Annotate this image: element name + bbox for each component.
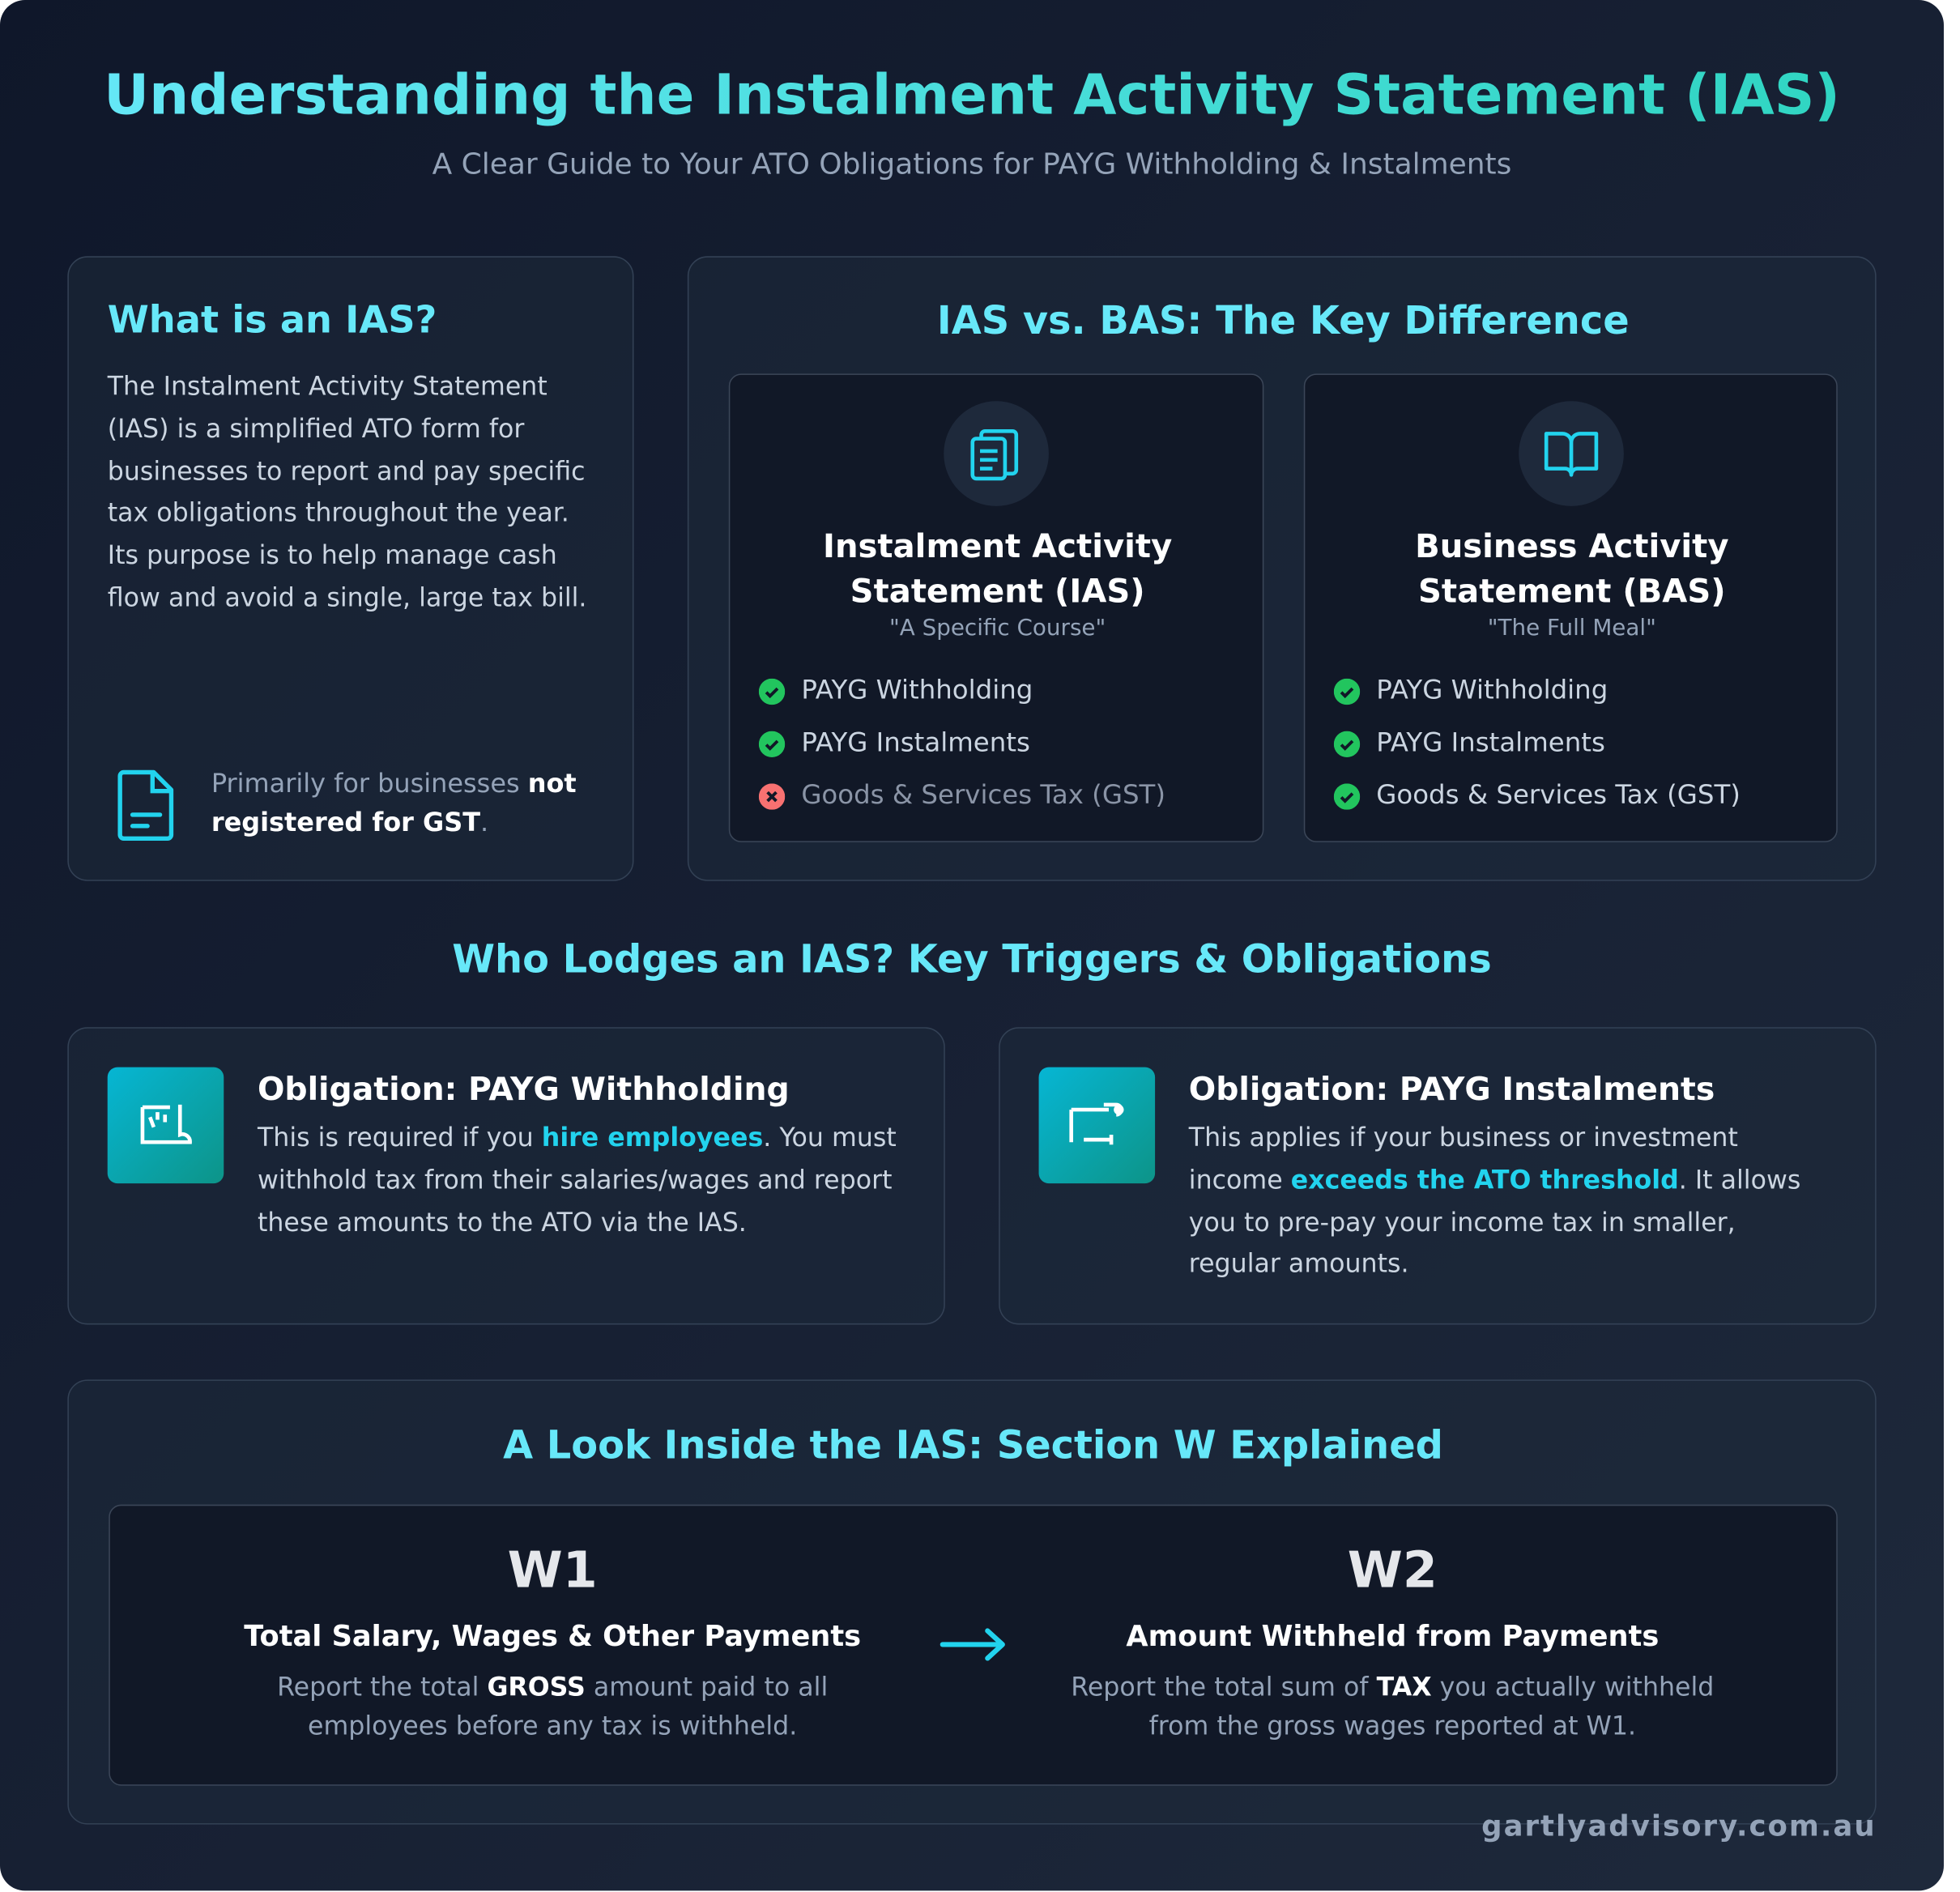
sub-card: IAS: Goods & Services Tax (GST) bbox=[801, 780, 1165, 810]
icon: withholding bbox=[108, 1067, 224, 1183]
heading: What is an IAS? bbox=[108, 299, 437, 343]
sub-card: BAS: PAYG Instalments bbox=[1376, 727, 1605, 757]
icon: document bbox=[117, 769, 173, 841]
text: This applies if your business or investment income exceeds the ATO threshold. It allows you to pre-pay your income tax in smaller, regular amounts. bbox=[1189, 1123, 1800, 1279]
icon: clipboard bbox=[944, 401, 1049, 506]
panel: PAYG withholding bbox=[67, 1027, 945, 1324]
panel: section W bbox=[67, 1379, 1877, 1825]
inner box bbox=[109, 1505, 1838, 1786]
title: Obligation: PAYG Withholding bbox=[258, 1071, 790, 1109]
note text: Primarily for businesses not registered for GST. bbox=[211, 769, 577, 837]
W2: Report the total sum of TAX you actually withheld bbox=[1071, 1672, 1714, 1702]
title: Understanding the Instalment Activity Statement (IAS) bbox=[104, 62, 1840, 127]
sub-card: BAS: PAYG Withholding bbox=[1376, 675, 1608, 705]
icon: book bbox=[1519, 401, 1624, 506]
sub-card: IAS: PAYG Withholding bbox=[801, 675, 1033, 705]
title bbox=[1415, 529, 1728, 611]
W1: W1 bbox=[508, 1542, 598, 1600]
W2: W2 bbox=[1348, 1542, 1438, 1600]
title: Statement (IAS) bbox=[850, 573, 1145, 611]
title: Statement (BAS) bbox=[1418, 573, 1726, 611]
section heading: who lodges: Who Lodges an IAS? Key Triggers & Obligations bbox=[452, 937, 1492, 982]
title: Business Activity bbox=[1415, 529, 1728, 566]
sub-card: BAS: Goods & Services Tax (GST) bbox=[1376, 780, 1741, 810]
W1: Report the total GROSS amount paid to all bbox=[277, 1672, 828, 1702]
W2 bbox=[1071, 1542, 1714, 1741]
subtitle: A Clear Guide to Your ATO Obligations for PAYG Withholding & Instalments bbox=[432, 147, 1511, 181]
W2: from the gross wages reported at W1. bbox=[1149, 1711, 1636, 1741]
list bbox=[758, 679, 786, 705]
panel: IAS vs BAS bbox=[688, 256, 1877, 881]
title: Instalment Activity bbox=[823, 529, 1172, 566]
heading: IAS vs. BAS: The Key Difference bbox=[937, 299, 1630, 343]
sub-card: BAS bbox=[1304, 373, 1838, 842]
text: This is required if you hire employees. You must withhold tax from their salaries/wages and report these amounts to the ATO via the IAS. bbox=[258, 1123, 897, 1237]
panel: PAYG instalments bbox=[999, 1027, 1877, 1324]
list bbox=[1333, 679, 1361, 705]
footer: gartlyadvisory.com.au bbox=[1481, 1811, 1877, 1843]
W1: employees before any tax is withheld. bbox=[308, 1711, 797, 1741]
sub-card: IAS: PAYG Instalments bbox=[801, 727, 1030, 757]
tagline: "The Full Meal" bbox=[1488, 615, 1656, 641]
title bbox=[823, 529, 1172, 611]
sub-card: IAS bbox=[729, 373, 1263, 842]
panel: what is an IAS bbox=[67, 256, 634, 881]
W1: Total Salary, Wages & Other Payments bbox=[244, 1621, 861, 1653]
icon: instalments bbox=[1039, 1067, 1155, 1183]
title: Obligation: PAYG Instalments bbox=[1189, 1071, 1715, 1109]
heading: A Look Inside the IAS: Section W Explained bbox=[503, 1423, 1443, 1468]
text block: The Instalment Activity Statement (IAS) is a simplified ATO form for businesses to report and pay specific tax obligations throughout the year. Its purpose is to help manage cash flow and avoid a single, large tax bill. bbox=[108, 371, 587, 612]
W2: Amount Withheld from Payments bbox=[1126, 1621, 1659, 1653]
arrow bbox=[940, 1628, 1005, 1660]
W1 bbox=[244, 1542, 861, 1741]
tagline: "A Specific Course" bbox=[889, 615, 1106, 641]
